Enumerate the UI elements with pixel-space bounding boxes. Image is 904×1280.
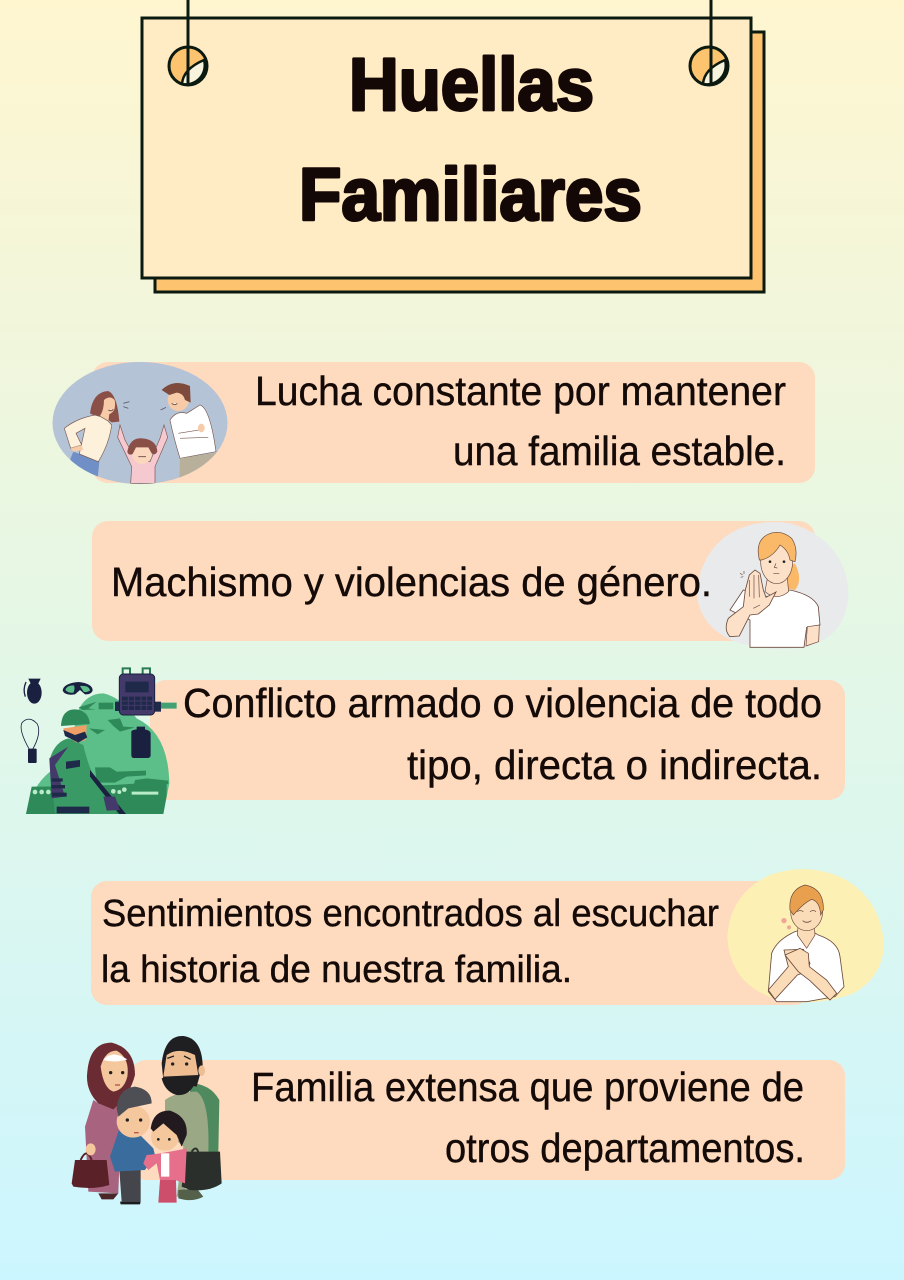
text 3: Conflicto armado o violencia de todo <box>183 680 822 726</box>
text 1: una familia estable. <box>453 428 786 474</box>
pill 5 <box>130 1060 845 1180</box>
icon: displaced family <box>72 1036 222 1204</box>
title text: Huellas <box>349 43 594 126</box>
right hanger <box>690 0 728 85</box>
text 3 <box>183 680 822 788</box>
title text: Familiares <box>299 153 642 236</box>
pill 1 <box>92 362 815 483</box>
text 4: la historia de nuestra familia. <box>101 949 572 991</box>
text 4 <box>101 893 719 991</box>
title board <box>142 0 764 292</box>
text 3: tipo, directa o indirecta. <box>407 742 822 788</box>
text 5 <box>251 1064 805 1171</box>
pill 4 <box>91 881 810 1005</box>
pill 3 <box>150 680 845 800</box>
panel: lucha constante <box>52 362 815 484</box>
text 4: Sentimientos encontrados al escuchar <box>102 893 719 935</box>
text 5: otros departamentos. <box>445 1125 805 1171</box>
pill 2 <box>92 521 815 641</box>
title text <box>299 43 642 236</box>
panel: familia extensa <box>72 1036 845 1204</box>
icon: arguing family <box>52 362 228 484</box>
panel: sentimientos encontrados <box>91 869 884 1005</box>
icon: soldier and military gear <box>21 668 177 814</box>
board front <box>142 18 751 278</box>
board shadow <box>155 32 764 292</box>
panel: machismo <box>92 521 848 649</box>
panel: conflicto armado <box>21 668 845 814</box>
icon: man with hands on chest <box>727 869 884 1002</box>
icon: woman stop gesture <box>697 522 848 649</box>
left hanger <box>169 0 207 85</box>
text 1: Lucha constante por mantener <box>255 368 786 414</box>
text 1 <box>255 368 786 474</box>
text 5: Familia extensa que proviene de <box>251 1064 804 1110</box>
text 2: Machismo y violencias de género. <box>111 559 712 605</box>
